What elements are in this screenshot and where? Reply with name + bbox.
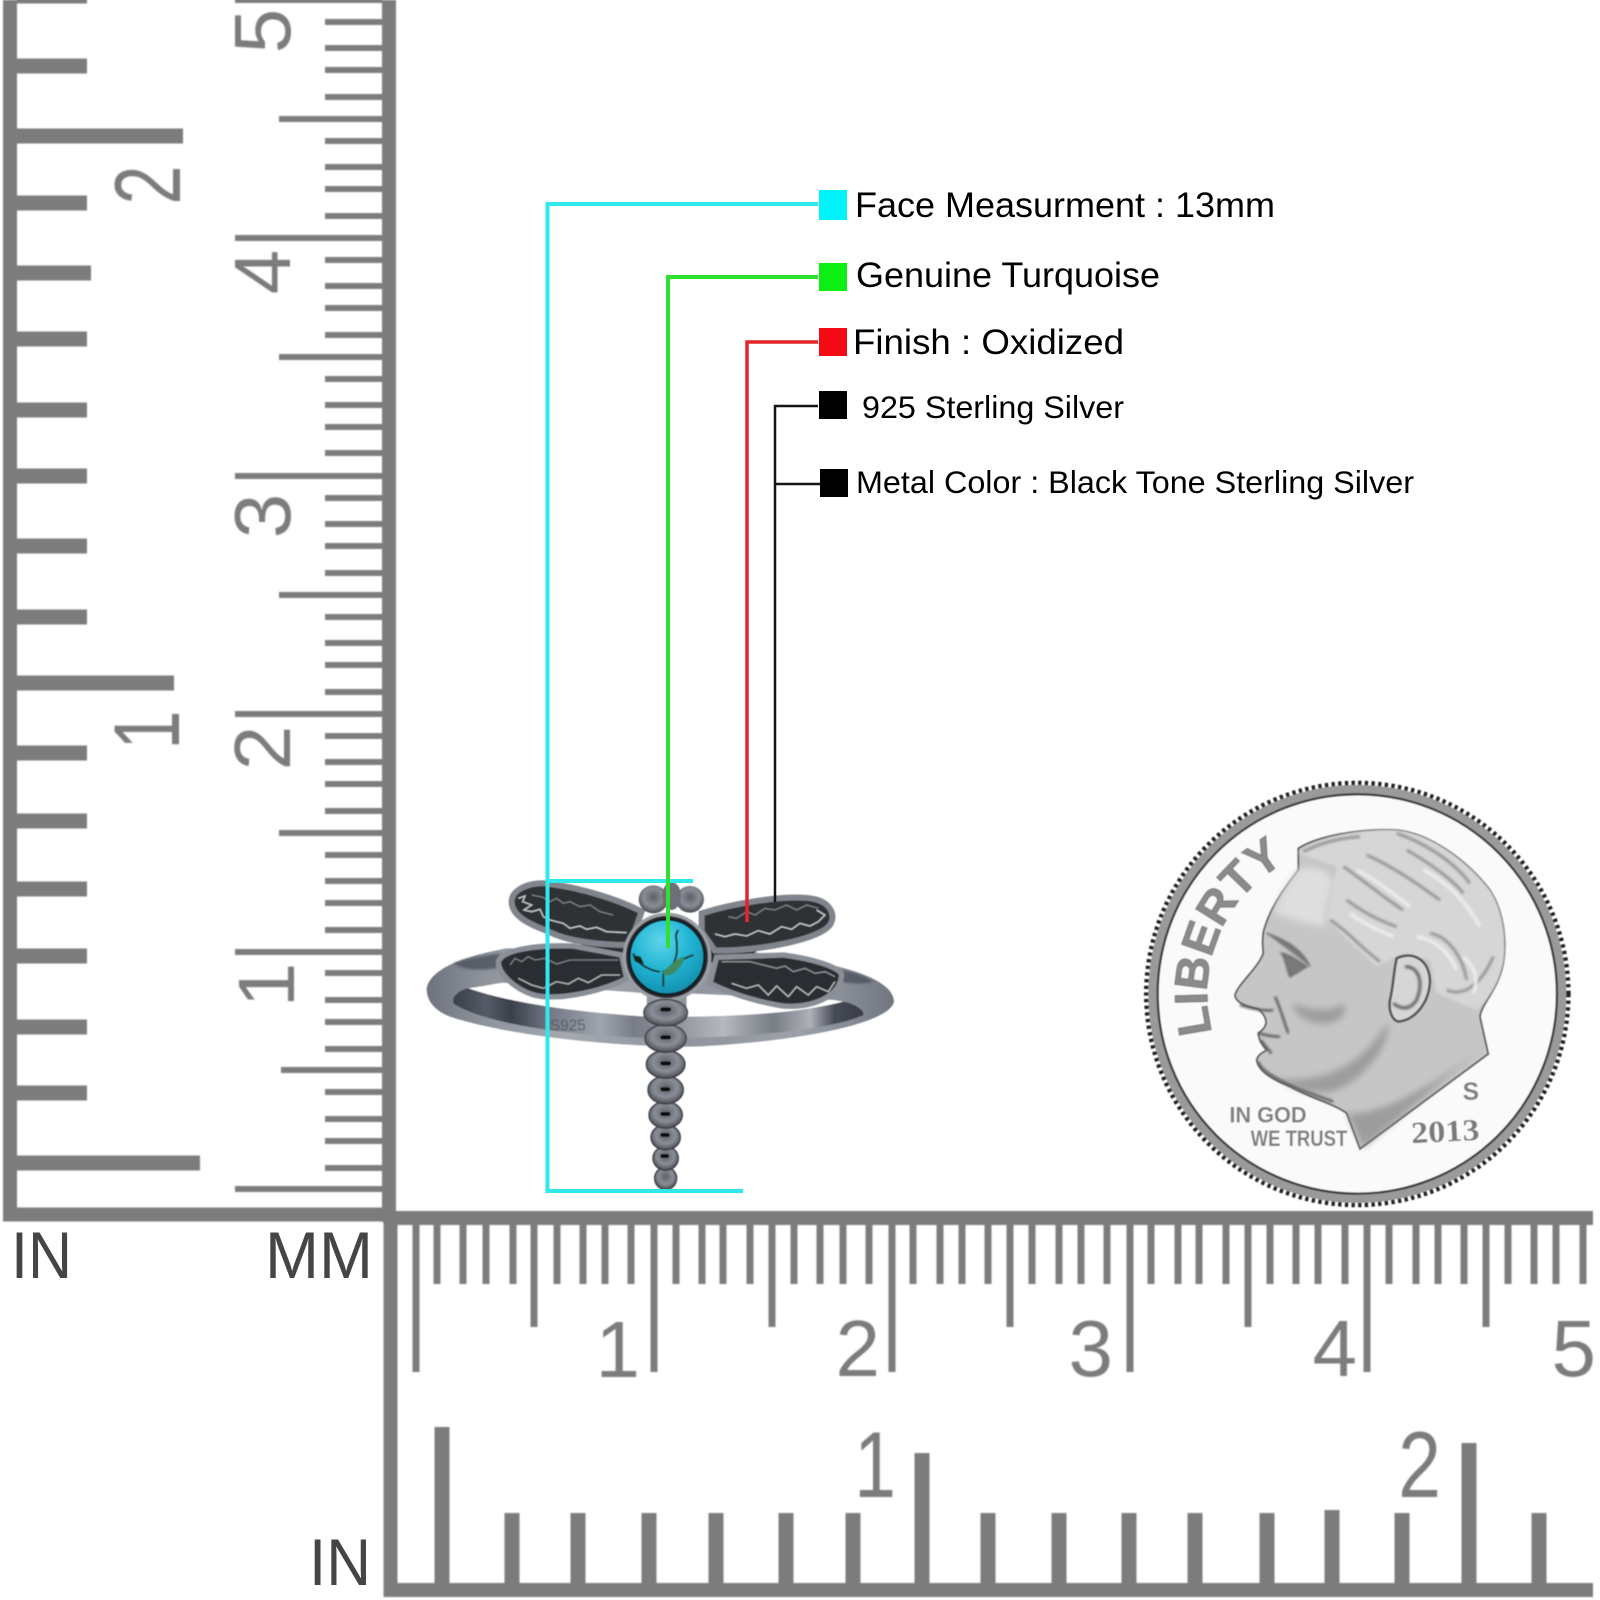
mm label 4: 4 [1312,1304,1357,1393]
motto arc path [1207,844,1391,1033]
head eyes [639,882,704,913]
unit labels [11,1218,373,1599]
S925 stamp: S925 [550,1017,586,1034]
inch tick marks [442,1427,1539,1583]
mm label 1: 1 [596,1305,640,1394]
horizontal ruler [384,1211,1593,1597]
inch label 1: 1 [94,710,199,750]
band shadow left [453,953,500,970]
mm label 1: 1 [222,963,311,1007]
marker green [819,263,847,291]
vertical ruler numbers [94,9,311,1007]
legend [819,186,1414,500]
nose, mouth and chin lines [1240,997,1333,1102]
wing lower right [710,955,842,1006]
abdomen segments [644,999,688,1190]
inner band surface [453,988,863,1038]
wing upper left [512,883,642,945]
hair [1298,830,1505,1010]
millimetre tick marks [416,1225,1583,1372]
marker black silver [819,391,847,419]
hair strokes light [1350,870,1480,993]
dime coin [1143,780,1572,1208]
vertical ruler [3,0,396,1222]
hair strokes dark [1303,833,1493,992]
coin portrait [1235,830,1505,1149]
label face measurement: Face Measurment : 13mm [855,186,1275,225]
mm label 2: 2 [218,726,307,770]
marker red [819,328,847,356]
silver callout lines [775,406,820,902]
band shadow right [842,970,873,984]
label finish: Finish : Oxidized [853,323,1124,362]
turquoise stone [624,914,710,1000]
marker black metal color [820,469,848,497]
WE TRUST: WE TRUST [1251,1126,1348,1151]
wing lower left [498,946,627,997]
mm label 3: 3 [218,494,307,538]
ruler frame [384,1211,1593,1597]
label MM: MM [265,1218,373,1292]
inch label 1: 1 [854,1413,896,1518]
IN GOD: IN GOD [1229,1103,1307,1128]
marker cyan [819,190,847,220]
eye and brow [1267,933,1310,977]
label genuine turquoise: Genuine Turquoise [856,256,1160,295]
millimetre tick marks [235,0,382,1189]
turquoise callout line [668,277,818,948]
dragonfly ring [427,882,894,1190]
mm label 3: 3 [1068,1304,1113,1393]
label metal color: Metal Color : Black Tone Sterling Silver [856,464,1414,500]
LIBERTY legend: LIBERTY [1174,834,1276,1036]
face shadows [1280,1003,1483,1148]
mint mark S: S [1463,1079,1479,1106]
ear [1390,956,1430,1022]
mm label 5: 5 [218,9,307,53]
mm label 4: 4 [218,250,307,294]
white gap left [468,983,647,1017]
inch label 2: 2 [1398,1413,1441,1518]
label IN left: IN [11,1218,72,1292]
forehead highlight [1273,867,1333,927]
inch label 2: 2 [95,165,200,205]
ring band [427,948,894,1047]
face measurement bracket [548,204,818,1191]
coin rim [1147,783,1568,1205]
dark wing root [578,932,758,964]
label 925 sterling silver: 925 Sterling Silver [862,389,1124,425]
finish callout line [747,342,818,922]
mm label 2: 2 [836,1304,880,1393]
white gap right [687,993,843,1017]
ruler frame [3,0,396,1222]
wing upper right [702,898,832,951]
inch tick marks [17,0,200,1163]
year 2013: 2013 [1410,1113,1480,1150]
horizontal ruler numbers [596,1304,1596,1518]
label IN bottom: IN [309,1525,371,1599]
mm label 5: 5 [1552,1304,1596,1393]
